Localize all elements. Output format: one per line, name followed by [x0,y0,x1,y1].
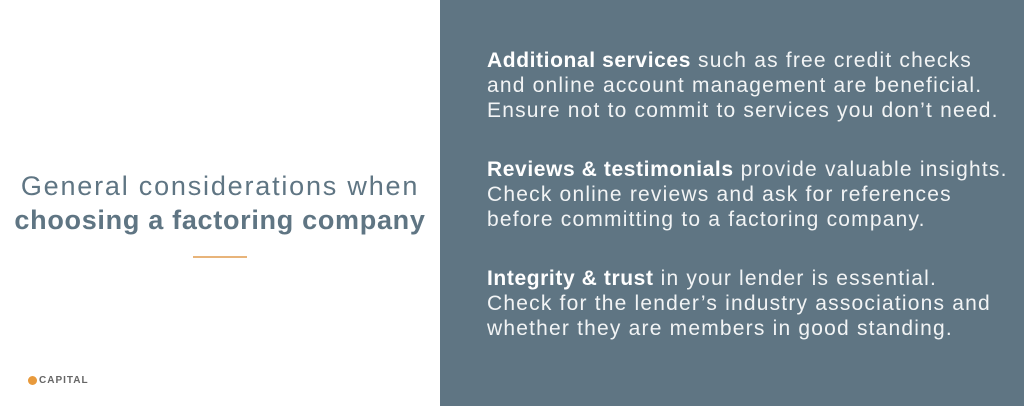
title: General considerations when [21,171,419,201]
title [14,171,426,235]
text block: integrity: whether they are members in good standing. [487,317,953,340]
text block: integrity [487,267,991,340]
text block: reviews: before committing to a factoring company. [487,208,926,231]
accent underline [193,256,247,258]
text block: reviews: Reviews & testimonials provide valuable insights. [487,158,1008,181]
left panel [0,0,440,406]
logo: CAPITAL [39,375,89,386]
panel: considerations [440,0,1024,406]
text block: additional services: Additional services such as free credit checks [487,49,972,72]
title: choosing a factoring company [14,205,426,235]
text block: reviews: Check online reviews and ask for references [487,183,952,206]
text block: additional services: Ensure not to commit to services you don’t need. [487,99,999,122]
text block: integrity: Integrity & trust in your lender is essential. [487,267,937,290]
text block: additional services: and online account management are beneficial. [487,74,982,97]
text block: additional services [487,49,999,122]
text block: reviews [487,158,1008,231]
text block: integrity: Check for the lender’s industry associations and [487,292,991,315]
